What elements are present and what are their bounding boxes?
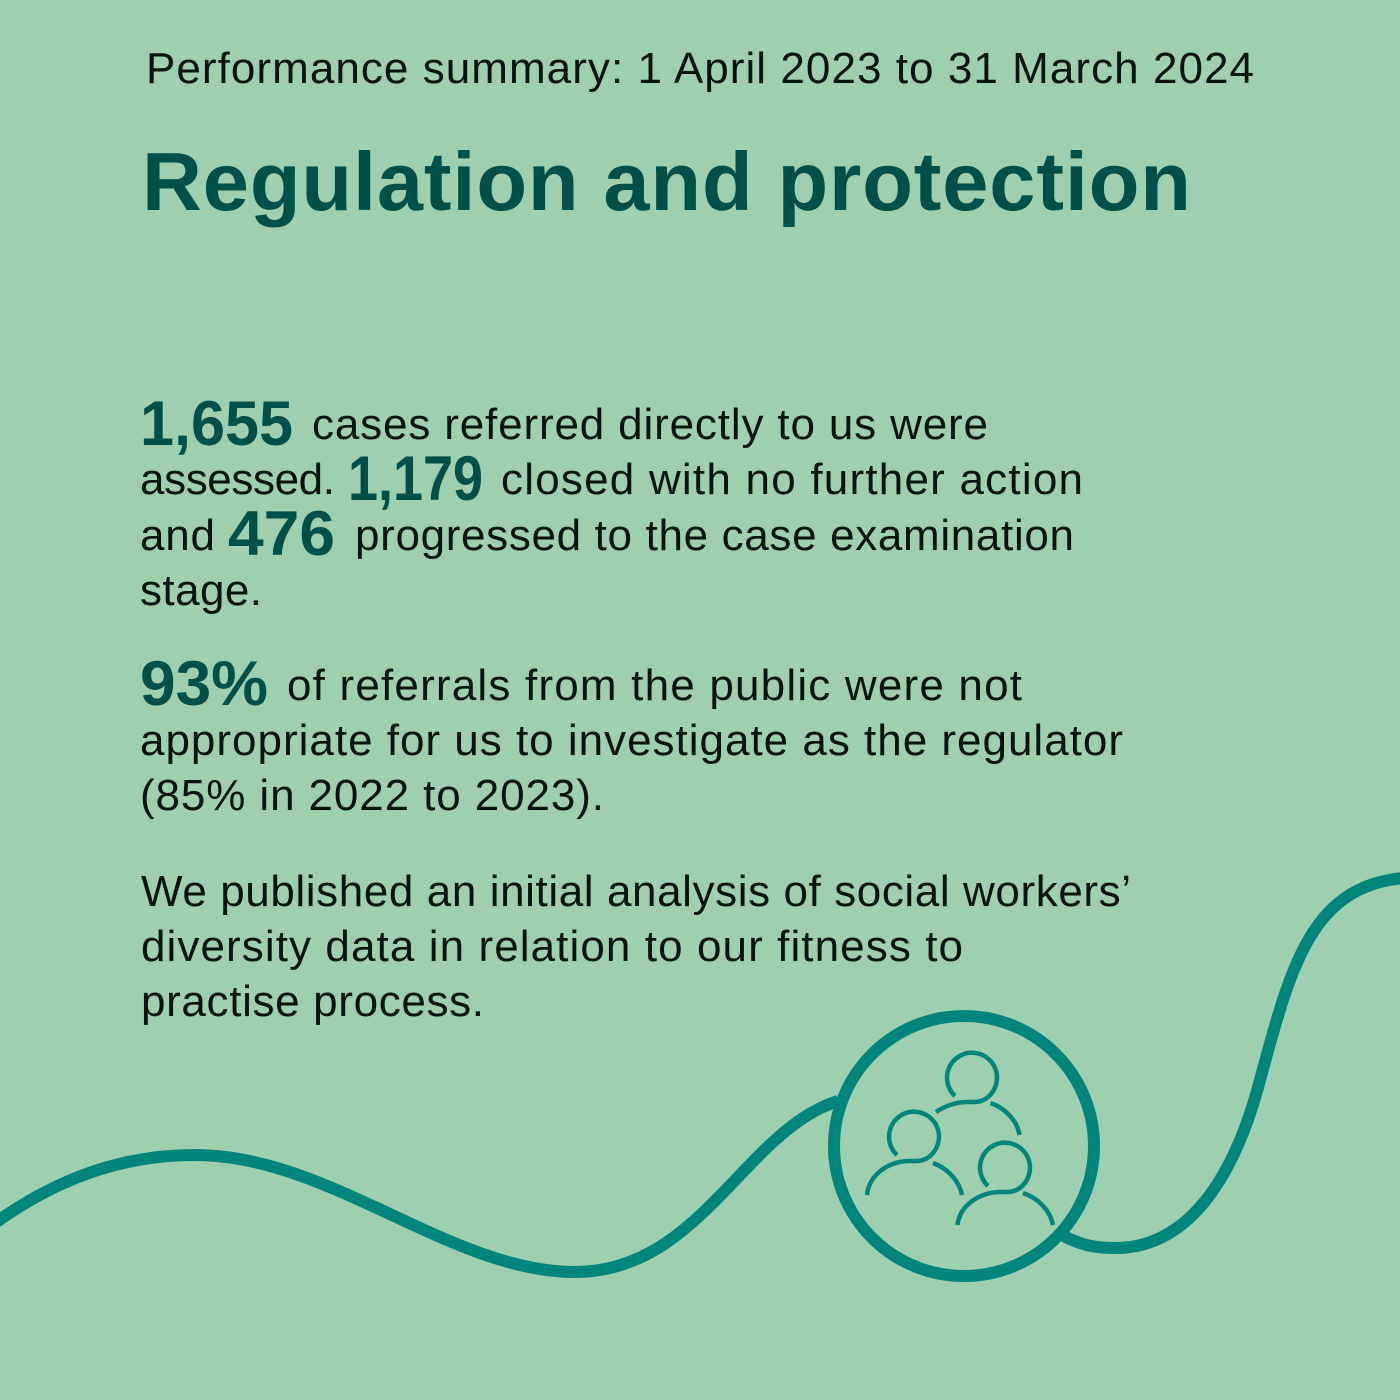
- line 2 end: closed with no further action: [501, 455, 1083, 504]
- line 3 start: and: [140, 511, 215, 560]
- person: top: [936, 1053, 1020, 1135]
- text block: diversity analysis: [141, 867, 1131, 1026]
- line 3 end: progressed to the case examination: [355, 511, 1074, 560]
- line 2 start: assessed.: [140, 455, 335, 504]
- line 2: diversity data in relation to our fitness to: [141, 922, 963, 971]
- wavy line: right: [1062, 878, 1400, 1248]
- text block: cases assessed: [140, 389, 1083, 615]
- line 4: stage.: [140, 566, 262, 615]
- icon ring: [834, 1016, 1094, 1276]
- person: left: [867, 1112, 962, 1195]
- text block: public referrals: [140, 649, 1123, 820]
- statistic: 93%: 93%: [140, 649, 268, 719]
- line 1: cases referred directly to us were: [312, 400, 988, 449]
- statistic: 1,179: 1,179: [348, 444, 483, 514]
- line 1: of referrals from the public were not: [287, 661, 1022, 710]
- statistic: 476: 476: [228, 499, 335, 569]
- line 2: appropriate for us to investigate as the regulator: [140, 716, 1123, 765]
- subtitle: Performance summary: 1 April 2023 to 31 March 2024: [146, 44, 1254, 93]
- line 3: practise process.: [141, 977, 484, 1026]
- statistic: 1,655: 1,655: [140, 389, 293, 459]
- line 3: (85% in 2022 to 2023).: [140, 771, 604, 820]
- wavy line: left: [0, 1101, 838, 1272]
- icon: people in circle: [834, 1016, 1094, 1276]
- person: right: [958, 1143, 1053, 1225]
- line 1: We published an initial analysis of social workers’: [141, 867, 1131, 916]
- title: Regulation and protection: [142, 135, 1191, 228]
